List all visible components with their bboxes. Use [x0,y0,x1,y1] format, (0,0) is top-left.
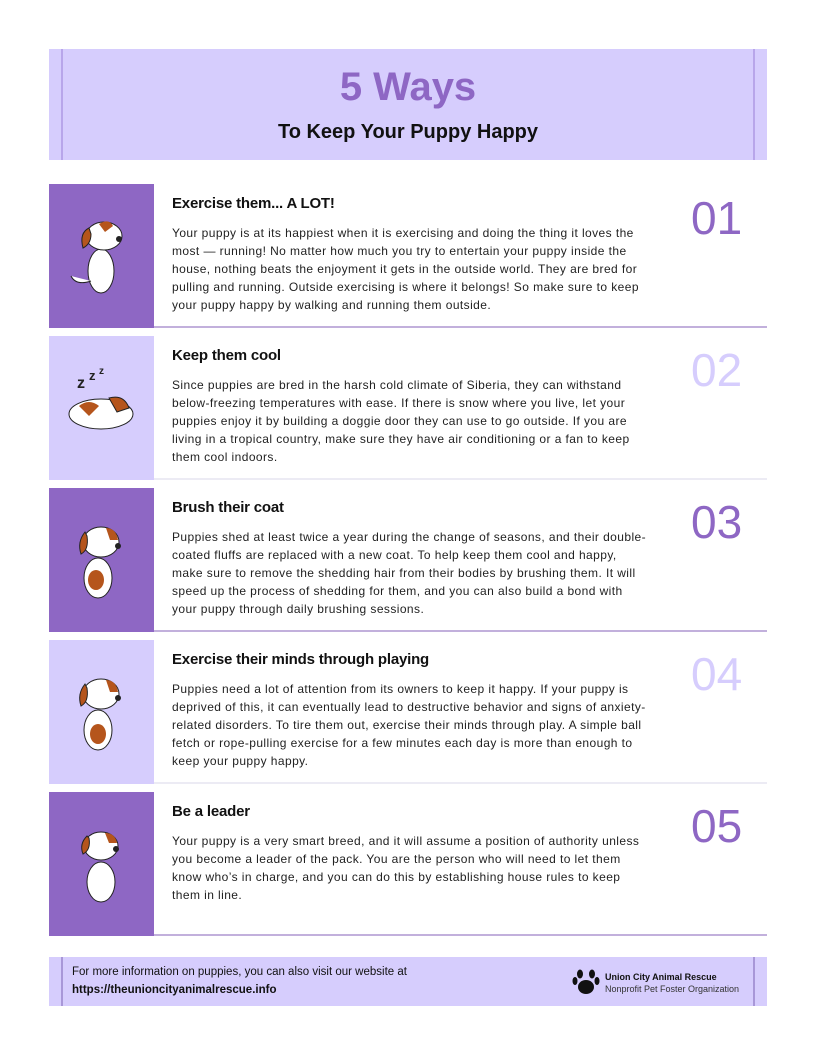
heading: Exercise them... A LOT! [172,195,335,212]
icon: sleeping dog [49,336,154,480]
text [172,530,646,616]
text: them cool indoors. [172,450,278,464]
text: Your puppy is at its happiest when it is exercising and doing the thing it loves the [172,226,634,240]
text [172,834,639,902]
text: your puppy through daily brushing sessions. [172,602,424,616]
row 04 [49,640,767,784]
text: house, nothing beats the enjoyment it gets in the outside world. They are bred for [172,262,637,276]
text [172,378,630,464]
text: make sure to remove the shedding hair from their bodies by brushing them. It will [172,566,636,580]
text: keep your puppy happy. [172,754,308,768]
icon: sleeping dog: z [77,375,85,392]
footer text: https://theunioncityanimalrescue.info [72,984,276,996]
text [172,226,639,312]
text: deprived of this, it can eventually lead to destructive behavior and signs of anxiety- [172,700,646,714]
title: 5 Ways [340,65,476,109]
heading: Brush their coat [172,499,284,516]
row 02 [49,336,767,480]
icon: dog [49,792,154,936]
footer text: For more information on puppies, you can also visit our website at [72,966,407,978]
header [49,49,767,160]
text: Since puppies are bred in the harsh cold climate of Siberia, they can withstand [172,378,621,392]
icon: dog [49,184,154,328]
text: Puppies need a lot of attention from its owners to keep it happy. If your puppy is [172,682,628,696]
text: fetch or rope-pulling exercise for a few minutes each day is more than enough to [172,736,633,750]
number: 03 [691,496,742,548]
heading: Keep them cool [172,347,281,364]
organization name [605,972,739,994]
text: puppies enjoy it by building a doggie door they can use to go outside. If you are [172,414,627,428]
text: below-freezing temperatures with ease. If there is snow where you live, let your [172,396,625,410]
icon: sleeping dog: z [89,368,96,383]
icon: sitting dog [49,640,154,784]
row 05 [49,792,767,936]
text: coated fluffs are replaced with a new coat. To help keep them cool and happy, [172,548,617,562]
number: 04 [691,648,742,700]
number: 01 [691,192,742,244]
number: 05 [691,800,742,852]
text: Your puppy is a very smart breed, and it will assume a position of authority unless [172,834,639,848]
subtitle: To Keep Your Puppy Happy [278,121,538,143]
text [172,682,646,768]
text: know who’s in charge, and you can do this by establishing house rules to keep [172,870,620,884]
text: speed up the process of shedding for them, and you can also build a bond with [172,584,623,598]
text: related disorders. To tire them out, exercise their minds through play. A simple ball [172,718,641,732]
icon: sleeping dog: z [99,366,104,377]
organization name: Nonprofit Pet Foster Organization [605,984,739,994]
number: 02 [691,344,742,396]
footer text [72,966,407,996]
text: your puppy happy by walking and running them outside. [172,298,491,312]
text: living in a tropical country, make sure they have air conditioning or a fan to keep [172,432,630,446]
text: Puppies shed at least twice a year during the change of seasons, and their double- [172,530,646,544]
text: pulling and running. Outside exercising is where it belongs! So make sure to keep [172,280,639,294]
row 01 [49,184,767,328]
text: them in line. [172,888,242,902]
icon: sitting dog [49,488,154,632]
icon: paw [572,970,600,994]
row 03 [49,488,767,632]
text: you become a leader of the pack. You are the person who will need to let them [172,852,621,866]
organization name: Union City Animal Rescue [605,972,717,982]
footer [49,957,767,1006]
heading: Be a leader [172,803,250,820]
heading: Exercise their minds through playing [172,651,429,668]
text: most — running! No matter how much you try to entertain your puppy inside the [172,244,627,258]
